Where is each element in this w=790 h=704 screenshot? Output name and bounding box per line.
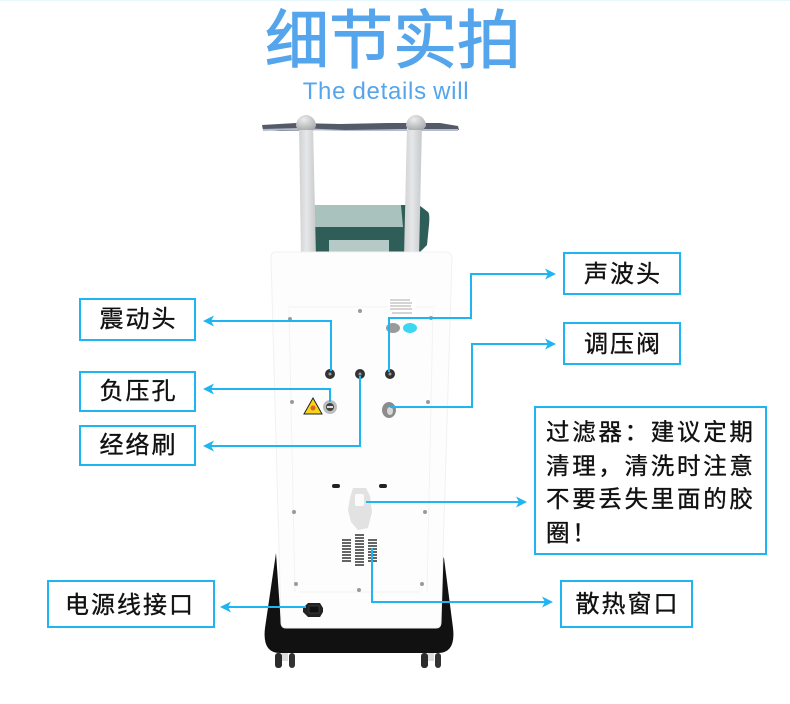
label: 调压阀: 调压阀: [584, 330, 662, 358]
screen: [313, 205, 429, 252]
filter: [332, 484, 387, 530]
label: 电源线接口: [47, 580, 215, 628]
screws: [288, 309, 433, 592]
label: 震动头: 震动头: [100, 306, 178, 332]
machine: [262, 115, 459, 668]
label: 散热窗口: [560, 580, 693, 628]
label: 负压孔: 负压孔: [100, 378, 178, 404]
panel seams: [287, 307, 435, 592]
label: 声波头: 声波头: [584, 260, 662, 288]
callout: 过滤器: 不要丢失里面的胶: [546, 486, 756, 512]
vent slots: [342, 535, 377, 565]
label: 散热窗口: 散热窗口: [576, 590, 680, 618]
warning sign: [304, 398, 322, 414]
callout: 过滤器: 清理，清洗时注意: [546, 453, 756, 479]
base cart: [265, 553, 453, 668]
arrowheads: [203, 268, 556, 612]
label: 负压孔: [79, 371, 196, 412]
tray: [262, 123, 459, 131]
subtitle: The details will: [303, 78, 469, 105]
label: 经络刷: [79, 425, 196, 466]
callout: 过滤器: 过滤器：建议定期: [546, 419, 756, 445]
label: 调压阀: [563, 322, 681, 365]
label: 电源线接口: 电源线接口: [65, 592, 195, 618]
label: 震动头: [79, 298, 196, 341]
ports: [323, 369, 396, 418]
callout: 过滤器: 圈！: [546, 520, 598, 546]
leader lines: [208, 274, 550, 607]
power socket: [303, 603, 323, 617]
cabinet body: [271, 252, 452, 628]
poles: [296, 115, 426, 258]
label: 经络刷: 经络刷: [100, 432, 178, 458]
label: 声波头: [563, 252, 681, 295]
rating label: [386, 298, 417, 333]
title: 细节实拍: [265, 5, 521, 77]
callout: 过滤器: [534, 406, 767, 555]
